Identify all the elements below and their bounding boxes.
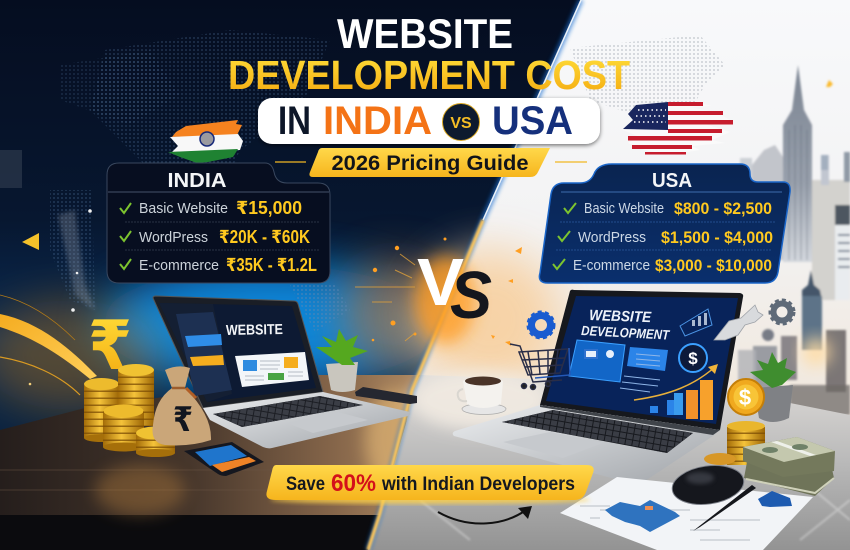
phone on desk: India [355, 387, 417, 404]
panel heading: USA [652, 170, 692, 192]
row: basic website: Basic Website [139, 200, 228, 217]
panel: India pricing [107, 163, 330, 283]
background: right light side [405, 0, 850, 430]
shopping cart [510, 344, 570, 390]
laptop: USA [453, 290, 743, 484]
pen [693, 485, 756, 531]
rocket [714, 305, 763, 340]
laptop: USA: $ [688, 349, 698, 368]
gears [528, 300, 794, 338]
arrow [438, 506, 532, 524]
title pill: in India vs USA: USA [492, 99, 573, 143]
vs badge [442, 104, 480, 140]
row: wordpress [120, 227, 310, 247]
coins: dollar [704, 379, 765, 465]
row: wordpress: WordPress [578, 229, 646, 246]
row: basic website: ₹15,000 [236, 198, 302, 218]
row: basic website [564, 199, 772, 218]
row: wordpress: $1,500 - $4,000 [661, 228, 773, 247]
plant: India [316, 329, 368, 392]
pricing guide ribbon [275, 148, 587, 177]
gold swoosh and rupee symbol [0, 295, 132, 395]
title line 2: DEVELOPMENT COST [228, 52, 630, 98]
cash stacks [743, 437, 835, 496]
callout: save 60 percent: 60% [331, 470, 376, 497]
callout: save 60 percent: Save [286, 474, 325, 495]
vs badge: VS [450, 115, 472, 132]
row: e-commerce: E-commerce [139, 257, 219, 274]
VS emblem: V [417, 245, 464, 320]
table: dark wood, left [0, 375, 425, 550]
row: e-commerce: E-commerce [573, 257, 650, 274]
central glowing divide [368, 0, 581, 550]
row: e-commerce: ₹35K - ₹1.2L [226, 255, 317, 275]
city skyline [738, 65, 850, 415]
paper report [560, 477, 813, 550]
plant: USA [750, 352, 796, 422]
row: wordpress: WordPress [139, 229, 208, 246]
flag: USA [623, 102, 733, 155]
row: e-commerce: $3,000 - $10,000 [655, 256, 772, 275]
callout: save 60 percent [266, 465, 594, 504]
phone with banking app [184, 442, 264, 476]
VS emblem [417, 245, 492, 333]
coffee cup [458, 376, 506, 414]
flag: India [168, 120, 243, 163]
row: wordpress: ₹20K - ₹60K [219, 227, 310, 247]
money bag [152, 366, 211, 445]
row: wordpress [558, 228, 773, 247]
title pill: in India vs USA: INDIA [323, 99, 432, 143]
row: basic website: $800 - $2,500 [674, 199, 772, 218]
panel heading: INDIA [168, 170, 226, 192]
panel: USA pricing [539, 164, 790, 283]
gold swoosh and rupee symbol: ₹ [88, 308, 132, 384]
title line 1: WEBSITE [337, 10, 513, 57]
VS emblem: S [450, 258, 492, 333]
laptop: India [153, 296, 410, 448]
laptop: India: WEBSITE [226, 322, 283, 339]
sparks [355, 238, 522, 346]
row: e-commerce [120, 255, 317, 275]
computer mouse [670, 461, 746, 509]
coins: dollar: $ [739, 385, 751, 410]
money bag: ₹ [173, 401, 193, 439]
row: e-commerce [553, 256, 772, 275]
title pill: in India vs USA: IN [278, 99, 311, 143]
pricing guide ribbon: 2026 Pricing Guide [332, 152, 528, 175]
table: marble, right [368, 370, 850, 550]
laptop: USA: WEBSITE [589, 307, 652, 326]
coin stacks [84, 364, 175, 457]
row: basic website: Basic Website [584, 200, 664, 217]
callout: save 60 percent: with Indian Developers [381, 474, 575, 495]
title pill: in India vs USA [258, 98, 600, 144]
laptop: USA: DEVELOPMENT [581, 323, 671, 343]
row: basic website [120, 198, 302, 218]
